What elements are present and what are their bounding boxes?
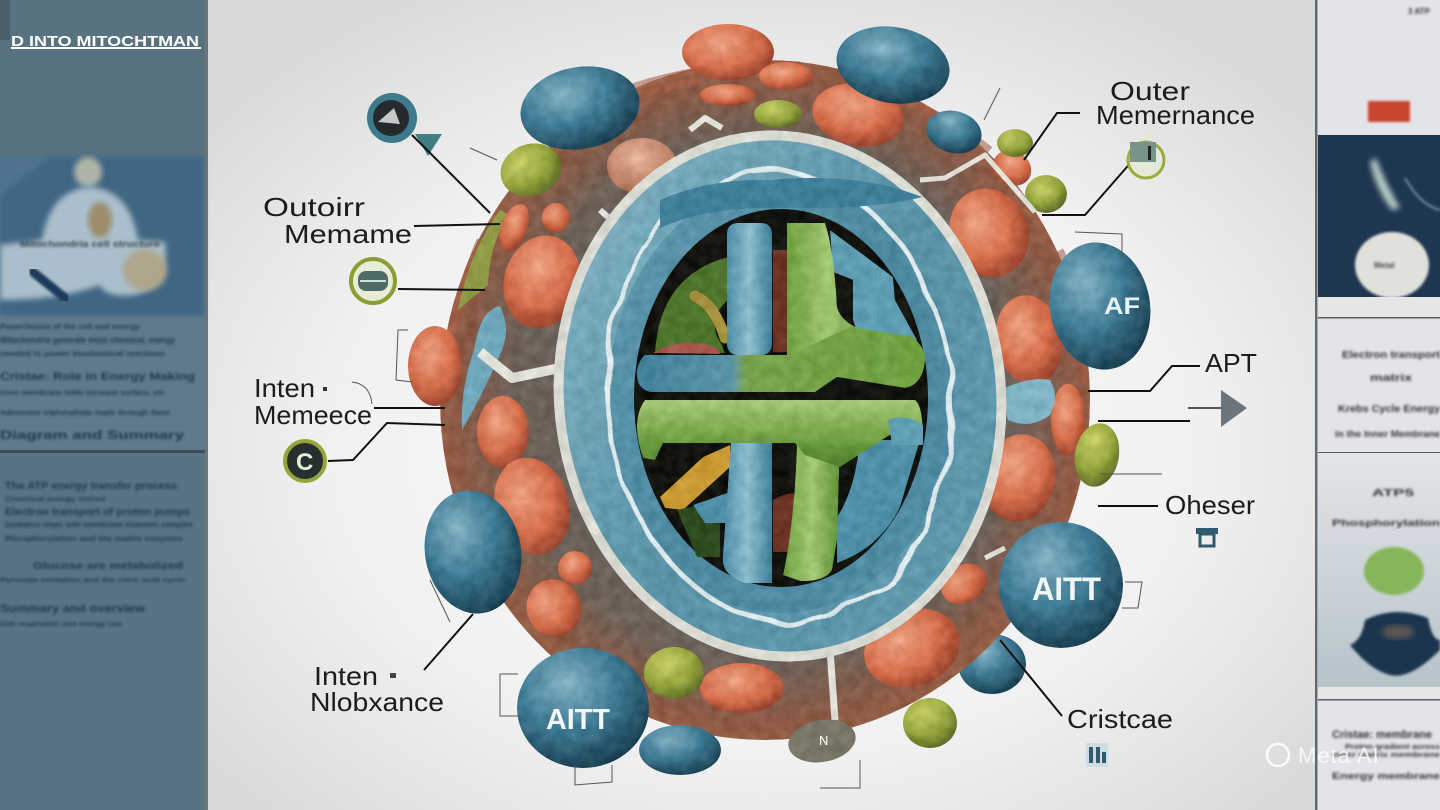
blue inner ring bbox=[538, 119, 1022, 673]
panel: right sidebar bbox=[1315, 0, 1440, 810]
bubble labels: AITT bbox=[1032, 571, 1101, 607]
top text and red chip: 3 ATP bbox=[1408, 7, 1430, 16]
icon: C badge: C bbox=[296, 449, 313, 476]
label: cristcae bbox=[1000, 640, 1173, 734]
bottom blurred text: Energy membrane bbox=[1332, 771, 1440, 781]
label: inten nlobxance: Inten bbox=[314, 661, 378, 691]
top tongue bbox=[660, 178, 922, 228]
sidebar blurred text bbox=[0, 324, 195, 628]
blue small fold bbox=[693, 492, 730, 523]
sidebar blurred text: Mitochondria generate most chemical, energy bbox=[0, 335, 175, 345]
sidebar blurred text: Electron transport of proton pumps bbox=[5, 507, 190, 518]
dark image panel bbox=[1318, 135, 1440, 298]
thin bracket outlines bbox=[396, 88, 1162, 788]
sidebar blurred text: Chemical energy stored bbox=[5, 497, 105, 503]
label: inten nlobxance bbox=[310, 614, 473, 717]
inner dark hole bbox=[634, 209, 928, 587]
mitochondrion sphere bbox=[408, 18, 1160, 775]
label: outer membrane left: Memame bbox=[284, 219, 412, 249]
label: oheser: Oheser bbox=[1165, 490, 1255, 520]
blue lower right fold bbox=[837, 440, 920, 563]
sidebar blurred text: Summary and overview bbox=[0, 603, 146, 615]
label: inten nlobxance: Nlobxance bbox=[310, 687, 444, 717]
olive bubbles bbox=[493, 100, 1124, 699]
cristae folds bbox=[637, 223, 925, 583]
blurred text block: Krebs Cycle Energy bbox=[1338, 404, 1440, 415]
icon: C badge bbox=[285, 423, 445, 481]
upper horizontal bar blue to green bbox=[637, 327, 925, 392]
bubble labels: AF bbox=[1104, 293, 1140, 320]
bubble labels bbox=[546, 293, 1140, 736]
icon: camera lens bbox=[367, 93, 490, 213]
green back fold bbox=[655, 257, 728, 353]
sidebar title: D INTO MITOCHTMAN bbox=[11, 33, 199, 50]
green strip on left edge bbox=[458, 210, 510, 310]
white connecting strands bbox=[480, 118, 1035, 720]
bottom blurred text: Cristae: membrane bbox=[1332, 729, 1432, 741]
label: inten membrane bbox=[254, 373, 445, 430]
watermark: Meta AI: Meta AI bbox=[1298, 743, 1380, 768]
sidebar blurred text: Pyruvate oxidation and the citric acid cycle bbox=[0, 578, 186, 584]
bottom blurred text bbox=[1332, 729, 1440, 781]
sidebar blurred text: Diagram and Summary bbox=[0, 428, 184, 442]
label: outer membrane right: Outer bbox=[1110, 76, 1190, 106]
green and dark shapes panel: ATP5 bbox=[1372, 488, 1415, 499]
sidebar blurred text: The ATP energy transfer process bbox=[5, 481, 177, 492]
panel: left sidebar bbox=[0, 0, 208, 810]
blue upper right fold bbox=[830, 230, 917, 340]
white outer membrane bbox=[527, 108, 1033, 684]
label: cristcae: Cristcae bbox=[1067, 704, 1173, 734]
dark image panel: Metal bbox=[1374, 261, 1394, 270]
wavy white line bbox=[585, 154, 975, 640]
bubble labels: AITT bbox=[546, 704, 610, 736]
sidebar blurred text: Inner membrane folds increase surface, etc bbox=[0, 390, 165, 397]
blue verticals bbox=[727, 223, 772, 355]
blurred text block: matrix bbox=[1370, 373, 1413, 384]
sidebar blurred text: needed to power biochemical reactions bbox=[0, 351, 165, 358]
yellow fold bbox=[660, 445, 730, 510]
blurred text block bbox=[1335, 350, 1440, 439]
sphere body bbox=[440, 60, 1090, 740]
salmon bubbles bbox=[408, 24, 1085, 713]
rear bottom teal bubble bbox=[639, 725, 721, 775]
ring: crista envelope bbox=[527, 108, 1033, 684]
blurred text block: Electron transport bbox=[1342, 350, 1440, 361]
brown folds bbox=[773, 250, 795, 352]
sidebar blurred text: Oxidative steps with membrane channels complex bbox=[5, 522, 193, 529]
olive finger bbox=[695, 296, 725, 338]
label: outer membrane left bbox=[263, 192, 500, 249]
label: APT with arrow bbox=[1088, 348, 1257, 427]
reddish membrane striations bbox=[445, 64, 1085, 380]
teal bubbles bbox=[415, 18, 1160, 768]
label: outer membrane right bbox=[1024, 76, 1255, 215]
label: APT with arrow: APT bbox=[1205, 348, 1257, 378]
central background bbox=[208, 0, 1316, 810]
green and dark shapes panel: Phosphorylation bbox=[1332, 518, 1440, 528]
pink fold bbox=[653, 343, 720, 354]
lower horizontal bar bbox=[637, 400, 923, 467]
icon: left membrane badge bbox=[351, 259, 485, 303]
capsule letter: N bbox=[819, 733, 828, 748]
bottom capsule bbox=[785, 714, 859, 768]
pale blue flaps bbox=[462, 306, 506, 430]
sidebar image bbox=[0, 157, 203, 315]
sidebar blurred text: Powerhouse of the cell and energy bbox=[0, 324, 140, 331]
rear teal and olive bubbles bbox=[903, 634, 1026, 748]
blurred text block: in the Inner Membrane bbox=[1335, 429, 1440, 439]
label: inten membrane: Memeece bbox=[254, 400, 372, 430]
lower green vertical bbox=[783, 440, 840, 581]
label: inten membrane: Inten bbox=[254, 373, 315, 403]
sidebar blurred text: Phosphorylation and the matrix enzymes bbox=[5, 536, 183, 543]
sidebar blurred text: Glucose are metabolized bbox=[33, 561, 183, 572]
icon: outer membrane badge bbox=[1128, 142, 1164, 178]
icon: cristcae glyph bbox=[1086, 743, 1108, 767]
tan bubble bbox=[607, 138, 677, 194]
label: outer membrane left: Outoirr bbox=[263, 192, 365, 222]
bottom blurred text: Proton gradient across bbox=[1345, 744, 1440, 751]
green and dark shapes panel bbox=[1318, 453, 1440, 687]
green upper vertical bbox=[787, 223, 870, 365]
darker shade around hole bbox=[621, 196, 941, 600]
label: outer membrane right: Memernance bbox=[1096, 100, 1255, 130]
icon: oheser glyph bbox=[1196, 528, 1218, 546]
sidebar blurred text: Cristae: Role in Energy Making bbox=[0, 371, 195, 383]
top text and red chip bbox=[1368, 7, 1430, 122]
blue tip on lower bar bbox=[888, 417, 923, 445]
sidebar blurred text: Adenosine triphosphate made through them bbox=[0, 410, 170, 417]
arrow bbox=[1188, 407, 1222, 409]
bottom blurred text: inner matrix membrane bbox=[1332, 752, 1440, 759]
sidebar blurred text: Cell respiration and energy use bbox=[0, 622, 123, 628]
dark green fold bbox=[677, 500, 720, 557]
sidebar image: Mitochondria cell structure bbox=[20, 239, 160, 249]
